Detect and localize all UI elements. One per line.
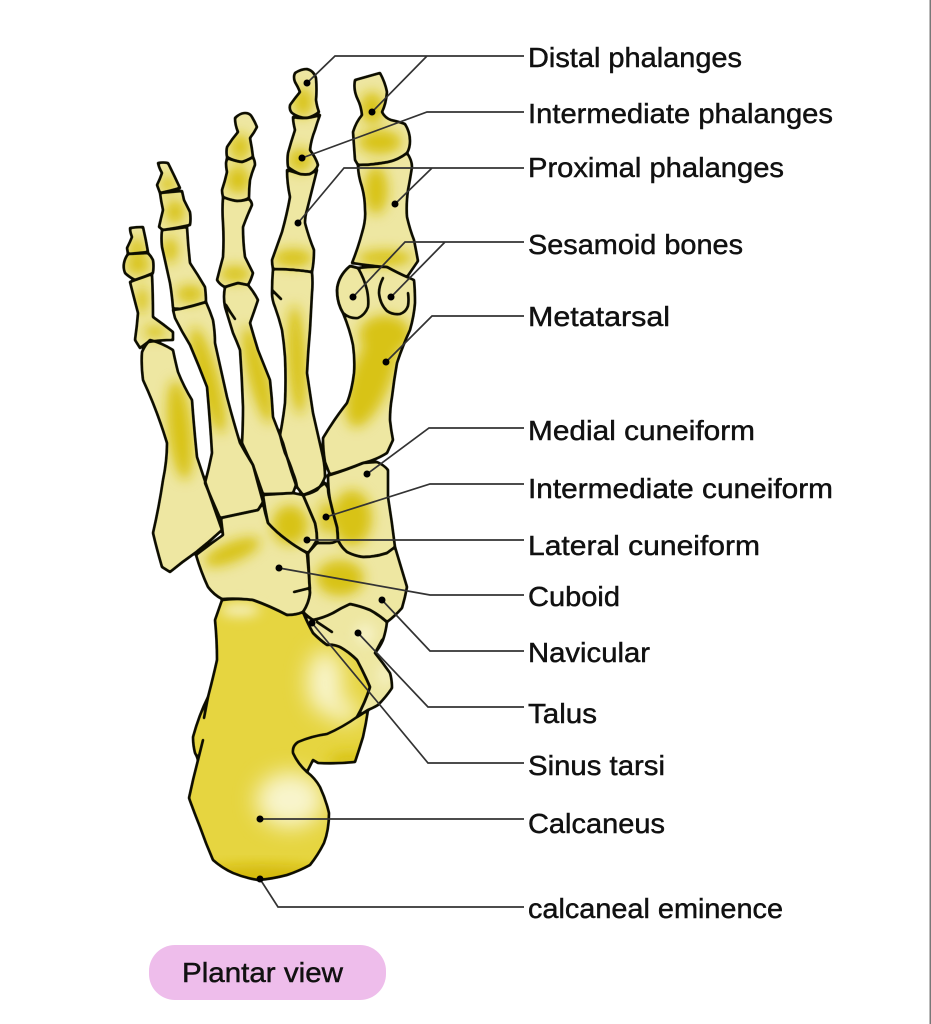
bone: fourth toe intermediate phalanx — [159, 191, 190, 230]
label: Lateral cuneiform: Lateral cuneiform — [528, 530, 760, 561]
bone: fourth metatarsal — [173, 302, 263, 518]
bone: fifth toe proximal phalanx — [130, 274, 173, 348]
label: Medial cuneiform: Medial cuneiform — [528, 415, 755, 446]
label: Cuboid — [276, 564, 620, 612]
label: Intermediate phalanges — [298, 98, 833, 162]
bone: second metatarsal — [272, 269, 325, 495]
bone: intermediate cuneiform — [303, 483, 338, 543]
bone base fill — [124, 69, 418, 880]
leader lines and labels — [256, 42, 833, 924]
bone detail ticks — [198, 291, 382, 772]
bone: big toe proximal phalanx — [352, 153, 418, 277]
label: Sesamoid bones: Sesamoid bones — [528, 229, 743, 260]
bone: lateral cuneiform — [263, 493, 317, 553]
bone: calcaneus — [189, 599, 370, 880]
bone: first metatarsal — [323, 266, 415, 475]
label: Cuboid: Cuboid — [528, 581, 620, 612]
label: Sinus tarsi: Sinus tarsi — [528, 750, 665, 781]
bone: fifth toe intermediate phalanx — [124, 253, 154, 280]
bone: second toe intermediate phalanx — [288, 115, 320, 174]
label: Medial cuneiform — [364, 415, 755, 478]
bone: big toe distal phalanx — [353, 73, 410, 165]
page edge line — [930, 0, 931, 1024]
bone: medial sesamoid — [337, 266, 368, 318]
bone: fifth metatarsal — [142, 340, 222, 572]
label: Intermediate cuneiform — [322, 473, 833, 520]
bone: talus — [303, 604, 392, 717]
label: calcaneal eminence — [256, 876, 783, 924]
label: Navicular: Navicular — [528, 637, 650, 668]
label: Sinus tarsi — [308, 620, 665, 781]
label: Proximal phalanges: Proximal phalanges — [528, 152, 784, 183]
label: Intermediate phalanges: Intermediate phalanges — [528, 98, 833, 129]
label: Distal phalanges: Distal phalanges — [528, 42, 742, 73]
bone: fifth toe distal phalanx — [127, 227, 148, 254]
bone shading — [126, 87, 413, 908]
label: Talus — [354, 630, 597, 729]
label: Metatarsal: Metatarsal — [528, 301, 670, 332]
label: Lateral cuneiform — [304, 530, 760, 561]
bone: fourth toe distal phalanx — [157, 162, 180, 193]
label: calcaneal eminence: calcaneal eminence — [528, 893, 783, 924]
label: Distal phalanges — [304, 42, 742, 116]
bone: second toe distal phalanx — [290, 69, 319, 118]
bone: medial cuneiform — [328, 462, 395, 557]
bone: cuboid — [196, 503, 310, 615]
label: Calcaneus — [256, 808, 665, 839]
bone: third toe distal phalanx — [226, 113, 257, 162]
bone: navicular — [303, 540, 407, 622]
bone outlines — [124, 69, 418, 880]
foot skeleton illustration — [124, 69, 418, 908]
bone: lateral sesamoid — [379, 278, 408, 314]
label: Calcaneus: Calcaneus — [528, 808, 665, 839]
bone: fourth toe proximal phalanx — [162, 227, 206, 309]
badge: Plantar view — [149, 945, 386, 1000]
bone: third toe proximal phalanx — [217, 197, 253, 287]
label: Navicular — [378, 596, 650, 668]
label: Talus: Talus — [528, 698, 597, 729]
badge: Plantar view: Plantar view — [182, 957, 343, 988]
bone: third metatarsal — [224, 283, 296, 494]
label: Proximal phalanges — [294, 152, 784, 226]
bone: third toe intermediate phalanx — [222, 157, 255, 201]
label: Metatarsal — [382, 301, 670, 366]
label: Sesamoid bones — [350, 229, 743, 300]
label: Intermediate cuneiform: Intermediate cuneiform — [528, 473, 833, 504]
bone: second toe proximal phalanx — [272, 170, 317, 272]
